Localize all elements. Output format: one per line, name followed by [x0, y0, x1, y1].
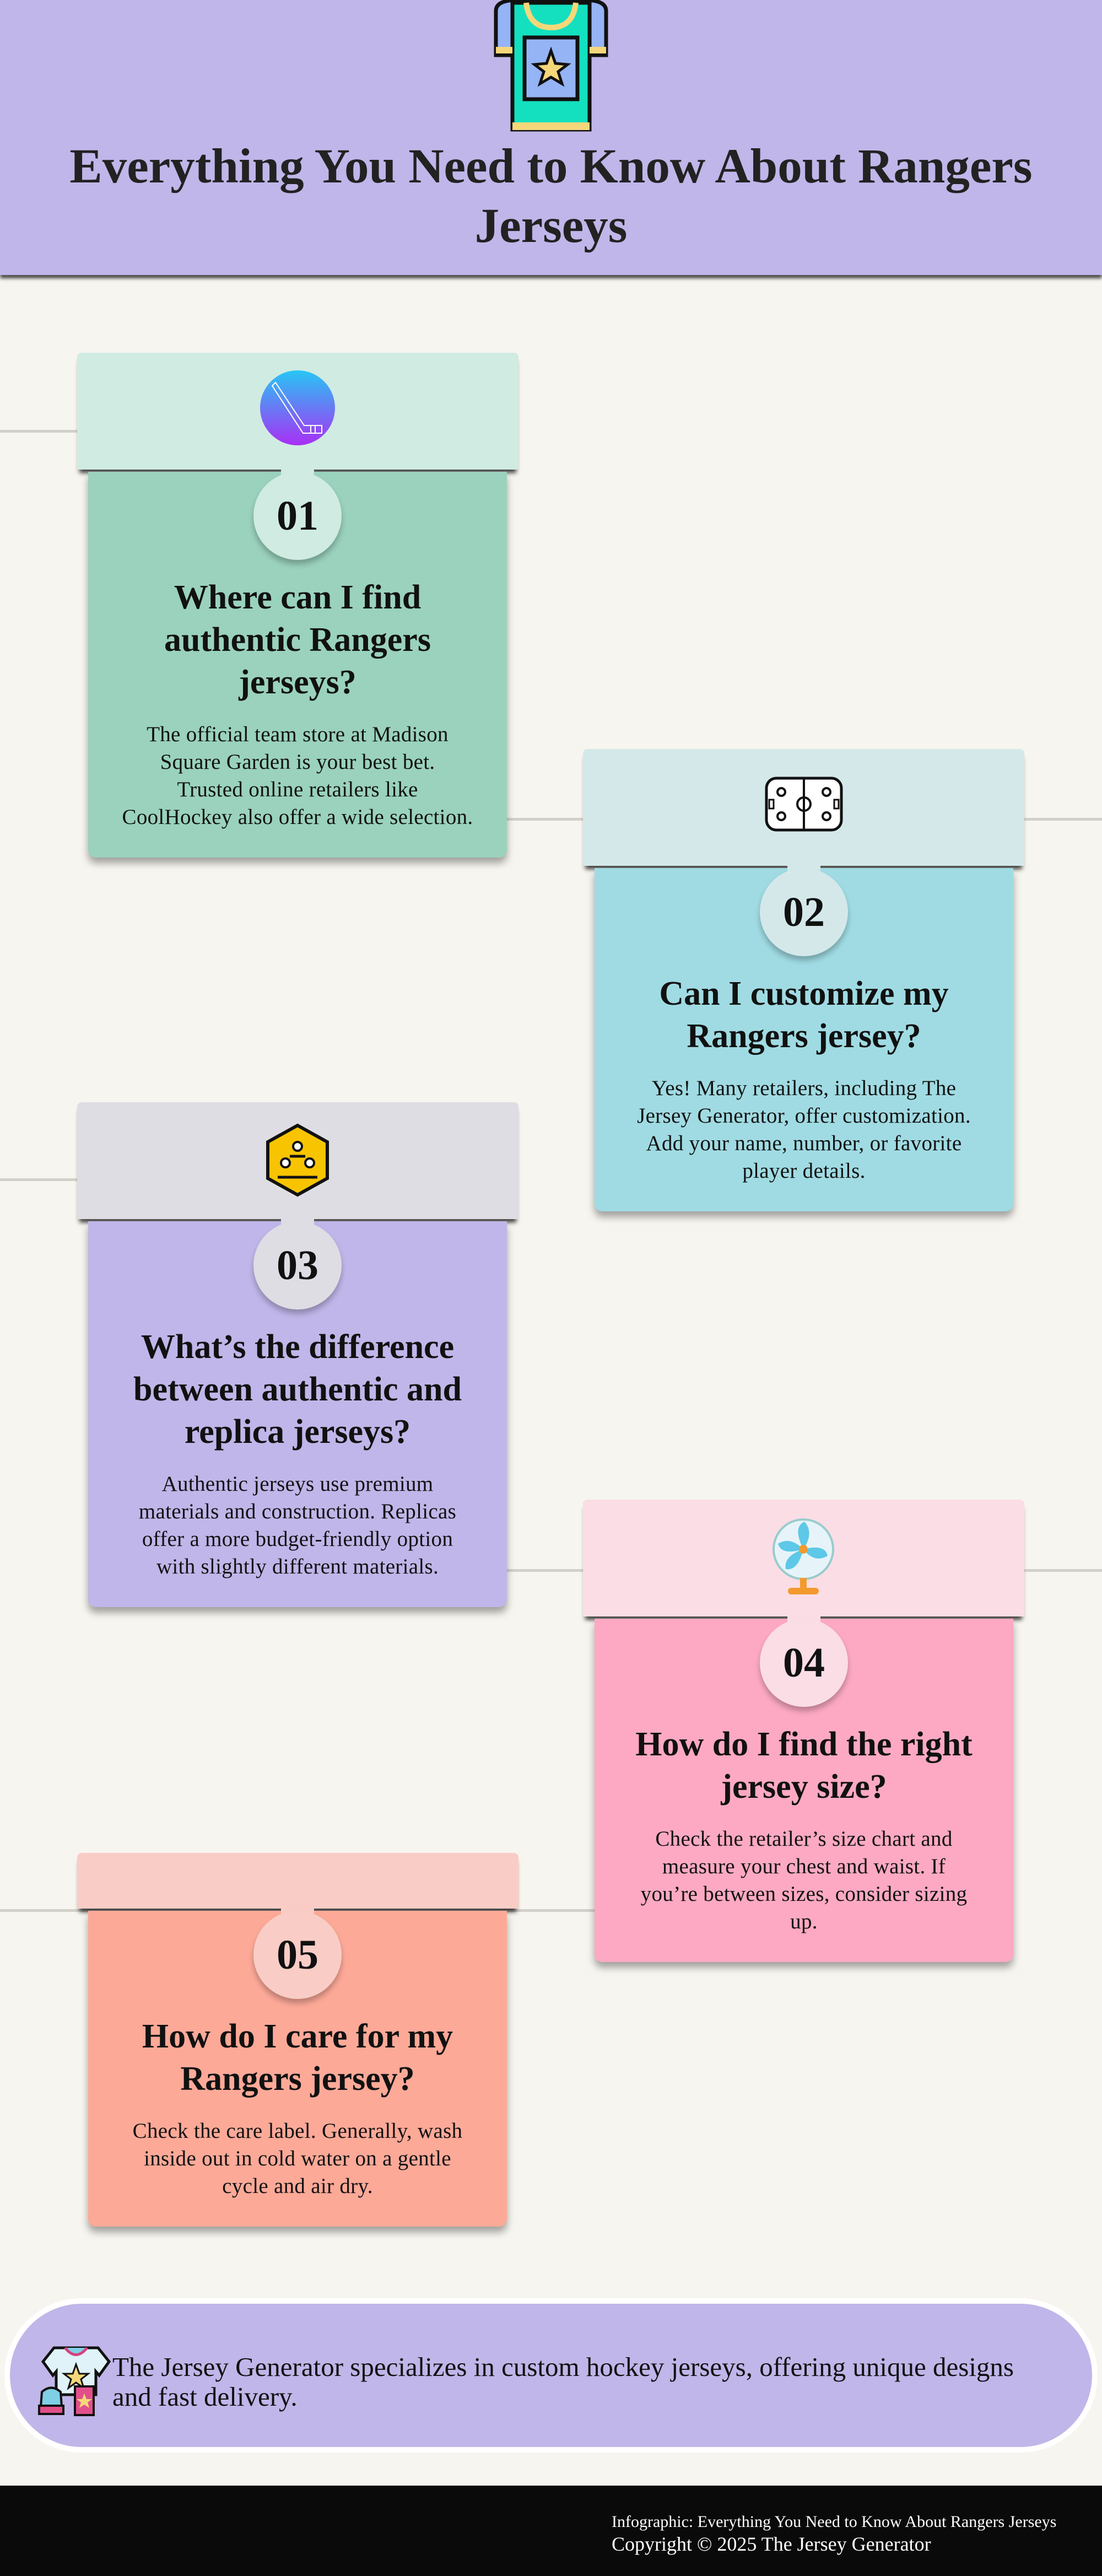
answer 02: Yes! Many retailers, including The: [652, 1076, 956, 1100]
number badge 05: 05: [277, 1932, 318, 1978]
number badge 01: 01: [277, 493, 318, 539]
question 02: Rangers jersey?: [687, 1017, 921, 1055]
answer 04: measure your chest and waist. If: [662, 1855, 946, 1878]
answer 01: CoolHockey also offer a wide selection.: [122, 805, 473, 829]
answer 01: [122, 723, 473, 829]
number badge 02: [760, 868, 848, 956]
question 01: jerseys?: [239, 664, 356, 701]
question 03: What’s the difference: [141, 1328, 454, 1366]
card header 03: [77, 1102, 518, 1219]
title: Everything You Need to Know About Rangers: [69, 139, 1033, 193]
answer 03: [139, 1472, 456, 1578]
icon: jersey and bags: [38, 2347, 111, 2416]
icon: team hexagon: [266, 1123, 329, 1197]
answer 05: cycle and air dry.: [222, 2174, 373, 2198]
answer 02: [637, 1076, 971, 1183]
answer 04: Check the retailer’s size chart and: [655, 1827, 953, 1851]
answer 01: Square Garden is your best bet.: [160, 750, 435, 774]
question 02: Can I customize my: [659, 975, 949, 1012]
card body 04: [595, 1619, 1013, 1962]
title: Jerseys: [475, 199, 627, 253]
icon: hockey rink: [765, 777, 843, 831]
about band: [4, 2298, 1098, 2453]
card 05: [76, 1853, 520, 2237]
icon: fan: [773, 1518, 834, 1594]
answer 05: [133, 2119, 462, 2198]
card header 01: [77, 353, 518, 470]
number badge 04: [760, 1619, 848, 1707]
footer: [0, 2486, 1102, 2576]
question 01: [164, 579, 431, 701]
answer 04: you’re between sizes, consider sizing: [641, 1882, 967, 1906]
about text: [112, 2352, 1014, 2412]
card body 02: [595, 868, 1013, 1211]
question 05: How do I care for my: [142, 2018, 453, 2055]
answer 02: player details.: [742, 1159, 866, 1183]
number badge 05: [253, 1911, 342, 1999]
card body 03: [88, 1221, 507, 1607]
answer 04: [641, 1827, 967, 1933]
about text: The Jersey Generator specializes in custom hockey jerseys, offering unique designs: [112, 2352, 1014, 2382]
answer 02: Add your name, number, or favorite: [646, 1131, 961, 1155]
question 05: [142, 2018, 453, 2098]
answer 03: Authentic jerseys use premium: [162, 1472, 433, 1496]
question 03: between authentic and: [133, 1371, 462, 1408]
title: [69, 139, 1033, 253]
number badge 04: 04: [783, 1640, 825, 1686]
question 05: Rangers jersey?: [180, 2060, 415, 2098]
answer 05: Check the care label. Generally, wash: [133, 2119, 462, 2143]
icon: jersey: [494, 0, 608, 131]
answer 01: Trusted online retailers like: [177, 778, 418, 801]
answer 03: materials and construction. Replicas: [139, 1500, 456, 1523]
connector lines: [0, 430, 77, 433]
icon: hockey stick: [260, 370, 335, 445]
card 03: [76, 1102, 520, 1618]
question 03: replica jerseys?: [185, 1413, 410, 1451]
card 02: [582, 749, 1026, 1222]
card body 05: [88, 1911, 507, 2227]
number badge 03: 03: [277, 1242, 318, 1289]
question 01: authentic Rangers: [164, 621, 431, 659]
card header 04: [583, 1500, 1024, 1616]
question 04: jersey size?: [721, 1768, 887, 1806]
footer text: [612, 2513, 1056, 2555]
question 04: [635, 1726, 973, 1806]
header banner: [0, 0, 1102, 275]
answer 05: inside out in cold water on a gentle: [144, 2147, 451, 2170]
question 03: [133, 1328, 462, 1451]
footer text: Infographic: Everything You Need to Know About Rangers Jerseys: [612, 2513, 1056, 2531]
answer 03: offer a more budget-friendly option: [142, 1527, 453, 1551]
answer 02: Jersey Generator, offer customization.: [637, 1104, 971, 1128]
answer 03: with slightly different materials.: [156, 1555, 439, 1578]
about text: and fast delivery.: [112, 2381, 298, 2412]
footer text: Copyright © 2025 The Jersey Generator: [612, 2533, 931, 2555]
number badge 02: 02: [783, 889, 825, 935]
question 04: How do I find the right: [635, 1726, 973, 1763]
card header 05: [77, 1853, 518, 1909]
card 01: [76, 353, 520, 868]
answer 01: The official team store at Madison: [147, 723, 449, 746]
question 02: [659, 975, 949, 1055]
number badge 01: [253, 472, 342, 560]
card 04: [582, 1500, 1026, 1973]
card header 02: [583, 749, 1024, 866]
answer 04: up.: [790, 1910, 818, 1933]
card body 01: [88, 472, 507, 858]
number badge 03: [253, 1221, 342, 1309]
question 01: Where can I find: [174, 579, 421, 616]
